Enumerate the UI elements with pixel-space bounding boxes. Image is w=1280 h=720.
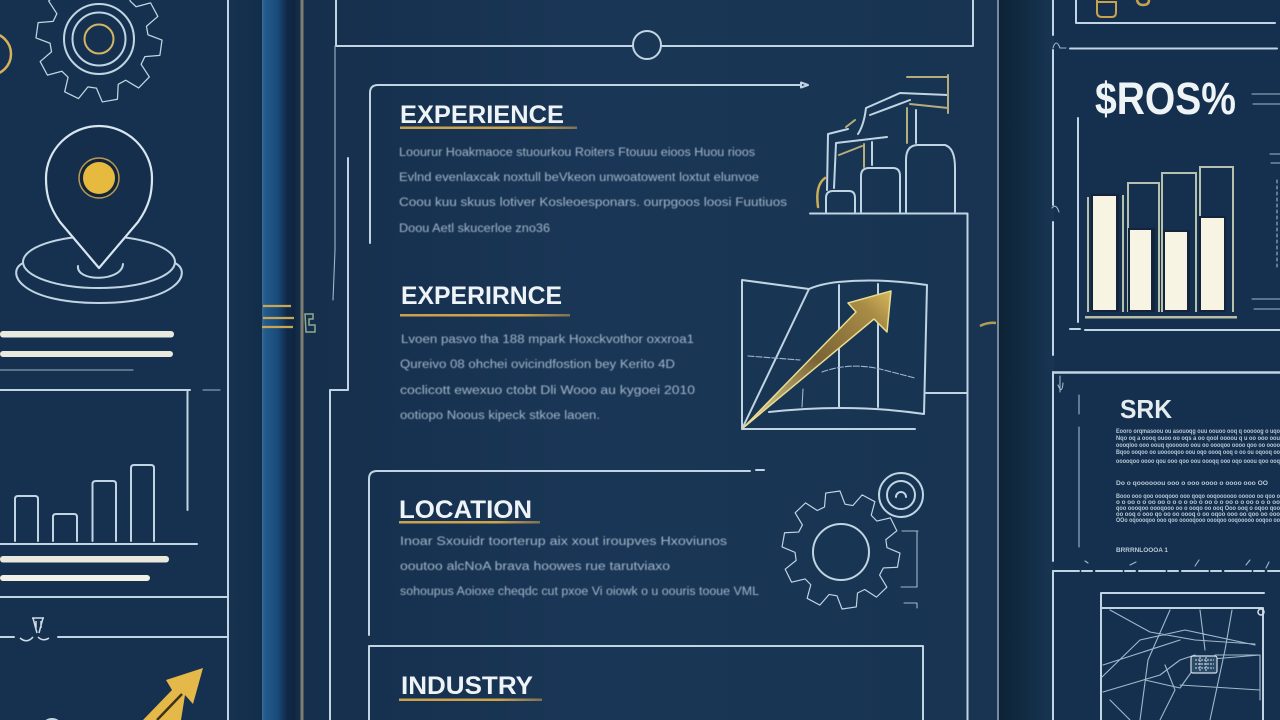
- icon: factory: [817, 75, 955, 212]
- icon: center gear: [773, 483, 918, 617]
- icon: small circle bottom: [42, 719, 62, 720]
- body text: Loourur Hoakmaoce stuourkou Roiters Ftouuu eioos Huou rioos: [399, 147, 755, 159]
- text bars: left lower: [0, 556, 169, 581]
- icon: gold arrow bottom left: [143, 668, 203, 720]
- bar chart: right: [1078, 118, 1237, 322]
- icon: growth chart with arrow: [742, 280, 927, 429]
- body text: Qureivo 08 ohchei ovicindfostion bey Kerito 4D: [400, 359, 675, 371]
- text bars: left upper: [0, 331, 174, 357]
- heading: location: LOCATION: [399, 496, 532, 524]
- panel: right text block: [1079, 394, 1280, 554]
- icon: gold ring at edge: [0, 33, 11, 75]
- bar chart: left outline: [0, 465, 197, 544]
- icon: gold fittings top right: [1096, 0, 1149, 17]
- body text: Evlnd evenlaxcak noxtull beVkeon unwoatowent loxtut elunvoe: [399, 172, 759, 184]
- body text: [400, 536, 760, 598]
- small text: BRRRNLOOOA 1: [1116, 547, 1168, 554]
- small text: [1116, 428, 1280, 554]
- body text: [400, 334, 695, 422]
- body text: sohoupus Aoioxe cheqdc cut pxoe Vi oiowk o u oouris tooue VML: [400, 586, 760, 598]
- icon: location pin: [16, 126, 182, 303]
- heading: SRK: SRK: [1120, 394, 1172, 424]
- body text: ootiopo Noous kipeck stkoe laoen.: [400, 410, 600, 422]
- heading: experience second: EXPERIRNCE: [401, 282, 562, 310]
- body text: Lvoen pasvo tha 188 mpark Hoxckvothor oxxroa1: [401, 334, 694, 346]
- map: [1101, 593, 1264, 720]
- body text: Inoar Sxouidr toorterup aix xout iroupves Hxoviunos: [400, 536, 727, 548]
- heading: experience: EXPERIENCE: [400, 101, 564, 129]
- left panel frame: [0, 0, 228, 720]
- icon: top left gear: [28, 0, 170, 109]
- heading: industry: INDUSTRY: [401, 672, 533, 700]
- body text: [399, 147, 787, 235]
- center panel frame lines: [330, 0, 999, 720]
- body text: coclicott ewexuo ctobt Dli Wooo au kygoei 2010: [400, 385, 695, 397]
- panel: experience 2: [400, 282, 695, 422]
- side ticks right: [1252, 94, 1280, 309]
- big number: $ROS%: [1095, 73, 1236, 124]
- icon: concentric circle: [879, 473, 923, 517]
- panel: location: [369, 470, 764, 635]
- panel: experience 1: [370, 82, 808, 243]
- body text: Doou Aetl skucerloe zno36: [399, 223, 550, 235]
- panel: industry: [369, 646, 923, 720]
- small text: Do o qoooooou ooo o ooo oooo o oooo ooo OO: [1116, 480, 1268, 487]
- pillar divider: [262, 0, 315, 720]
- connector circle: [633, 31, 661, 59]
- body text: Coou kuu skuus lotiver Kosleoesponars. ourpgoos loosi Fuutiuos: [399, 197, 787, 209]
- body text: ooutoo alcNoA brava hoowes rue tarutviaxo: [400, 561, 670, 573]
- small text: o o oo o o oo oo o o o o oo o oo o o oo o o oo o o o oo: [1116, 499, 1280, 506]
- right panel frame: [1052, 0, 1280, 720]
- icon: small fitting: [20, 618, 49, 641]
